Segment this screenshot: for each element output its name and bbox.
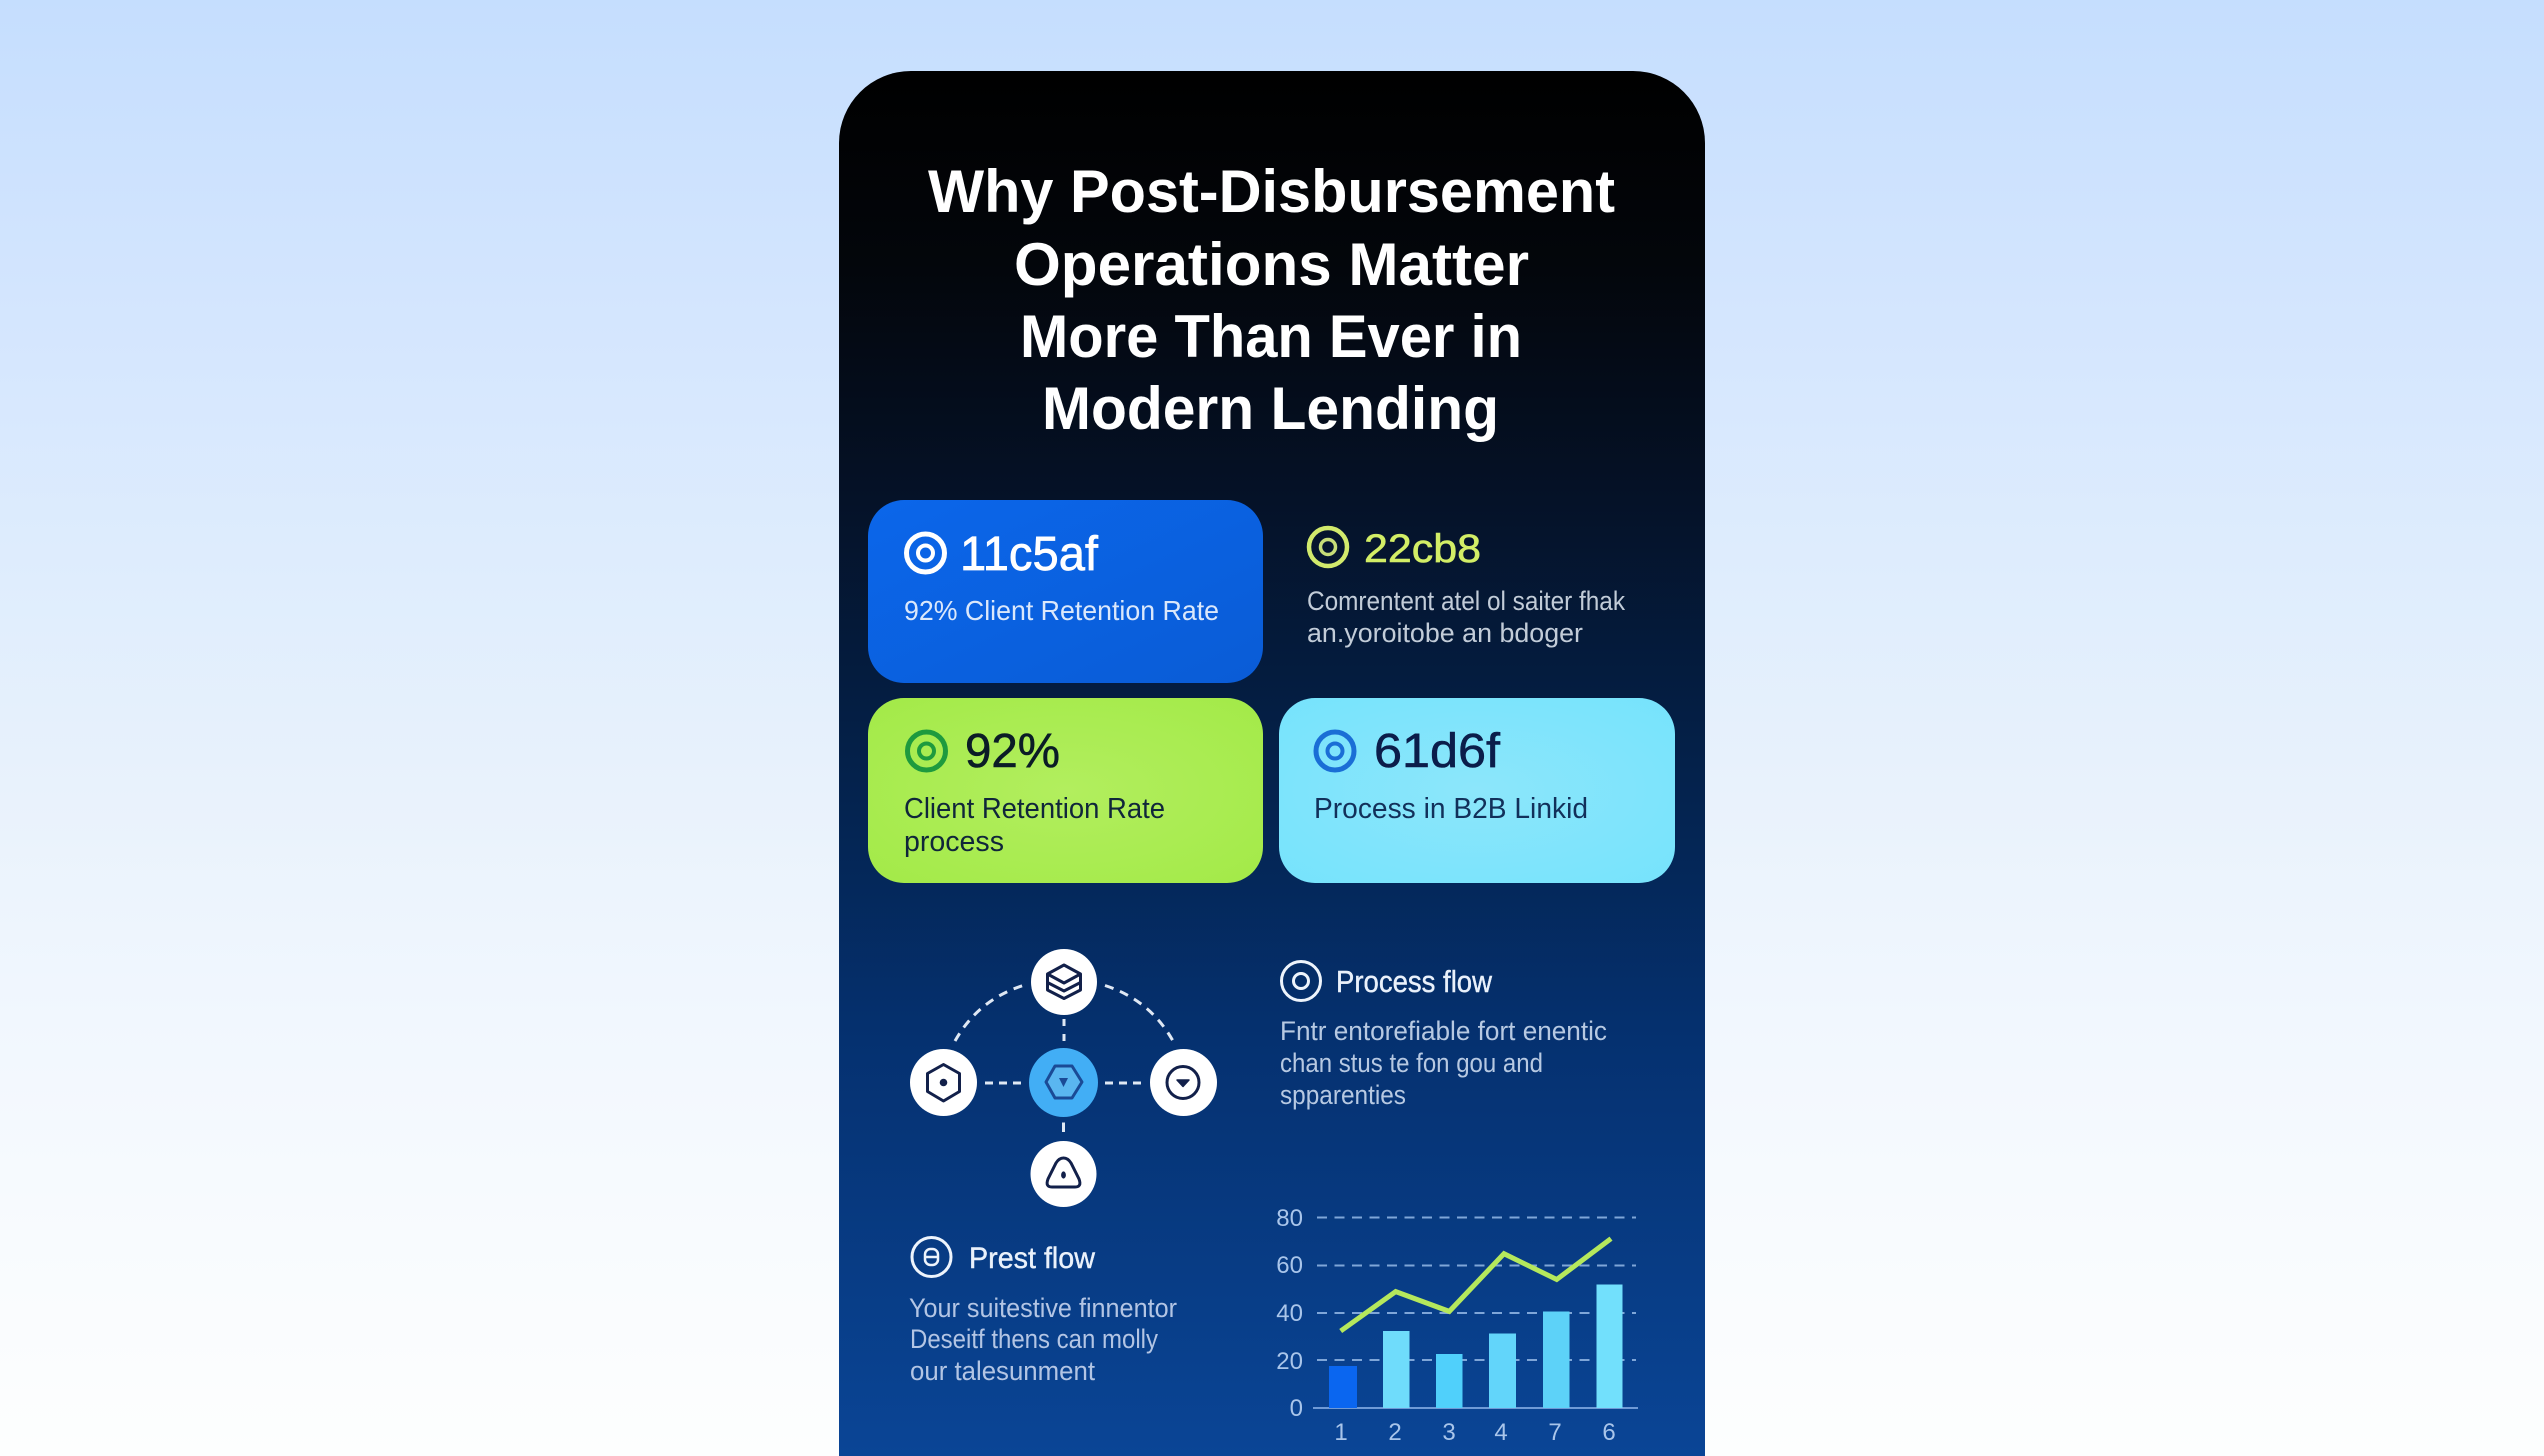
description: chan stus te fon gou and <box>1280 1048 1543 1078</box>
card: 11c5af blue <box>868 500 1263 683</box>
x axis labels: 3 <box>1442 1419 1456 1446</box>
card: 92% lime <box>868 698 1263 883</box>
description: spparenties <box>1280 1080 1406 1110</box>
x axis labels: 7 <box>1548 1419 1562 1446</box>
description: Fntr entorefiable fort enentic <box>1280 1016 1607 1046</box>
title: Why Post-Disbursement <box>928 158 1615 225</box>
icon: target ring <box>906 534 944 572</box>
node: bottom triangle <box>1030 1141 1096 1207</box>
icon: circled glyph <box>912 1238 951 1276</box>
heading: Prest flow <box>969 1242 1095 1275</box>
stat label: Process in B2B Linkid <box>1314 793 1588 825</box>
x axis labels: 4 <box>1494 1419 1508 1446</box>
section: Prest flow <box>909 1238 1177 1386</box>
x axis labels: 2 <box>1388 1419 1402 1446</box>
title <box>928 158 1615 442</box>
description: Comrentent atel ol saiter fhak <box>1307 586 1625 616</box>
icon: lime target ring <box>1309 528 1347 566</box>
stat label <box>904 793 1165 858</box>
x axis labels <box>1334 1419 1616 1446</box>
description <box>1280 1016 1607 1110</box>
title: Modern Lending <box>1042 375 1499 442</box>
section: Process flow <box>1280 962 1607 1110</box>
node: left hexagon <box>910 1049 977 1116</box>
x axis labels: 1 <box>1334 1419 1348 1446</box>
y axis labels: 0 <box>1290 1395 1303 1422</box>
icon: green target ring <box>908 732 946 770</box>
card: 61d6f cyan <box>1279 698 1675 883</box>
description: Deseitf thens can molly <box>910 1324 1158 1354</box>
description <box>909 1293 1177 1386</box>
y axis labels: 20 <box>1276 1348 1303 1375</box>
y axis labels: 60 <box>1276 1252 1303 1279</box>
y axis labels <box>1276 1205 1303 1422</box>
stat value: 11c5af <box>960 528 1099 581</box>
trend line <box>1341 1239 1611 1331</box>
node: right heart circle <box>1150 1049 1217 1116</box>
y axis labels: 40 <box>1276 1300 1303 1327</box>
node: centre hexagon <box>1029 1048 1098 1117</box>
description: an.yoroitobe an bdoger <box>1307 618 1583 648</box>
stat value: 61d6f <box>1374 725 1501 778</box>
stat label: 92% Client Retention Rate <box>904 595 1219 626</box>
stat value: 22cb8 <box>1364 527 1481 571</box>
panel: main dark card <box>839 71 1705 1456</box>
icon: blue target ring <box>1316 732 1354 770</box>
connectors <box>955 986 1173 1132</box>
title: Operations Matter <box>1014 231 1529 298</box>
title: More Than Ever in <box>1020 303 1522 370</box>
node diagram <box>910 949 1217 1207</box>
description: our talesunment <box>910 1356 1095 1386</box>
x axis <box>1313 1407 1638 1409</box>
chart: bars and line <box>1276 1205 1638 1446</box>
stat label: process <box>904 826 1004 858</box>
x axis labels: 6 <box>1602 1419 1616 1446</box>
bars <box>1329 1284 1622 1408</box>
heading: Process flow <box>1336 964 1493 999</box>
description: Your suitestive finnentor <box>909 1293 1177 1323</box>
icon: target ring <box>1282 962 1320 1000</box>
node: top layers <box>1031 949 1097 1015</box>
card: 22cb8 transparent <box>1307 527 1625 648</box>
stat label: Client Retention Rate <box>904 793 1165 825</box>
description <box>1307 586 1625 648</box>
stat value: 92% <box>965 725 1060 778</box>
grid lines <box>1317 1218 1636 1360</box>
y axis labels: 80 <box>1276 1205 1303 1232</box>
